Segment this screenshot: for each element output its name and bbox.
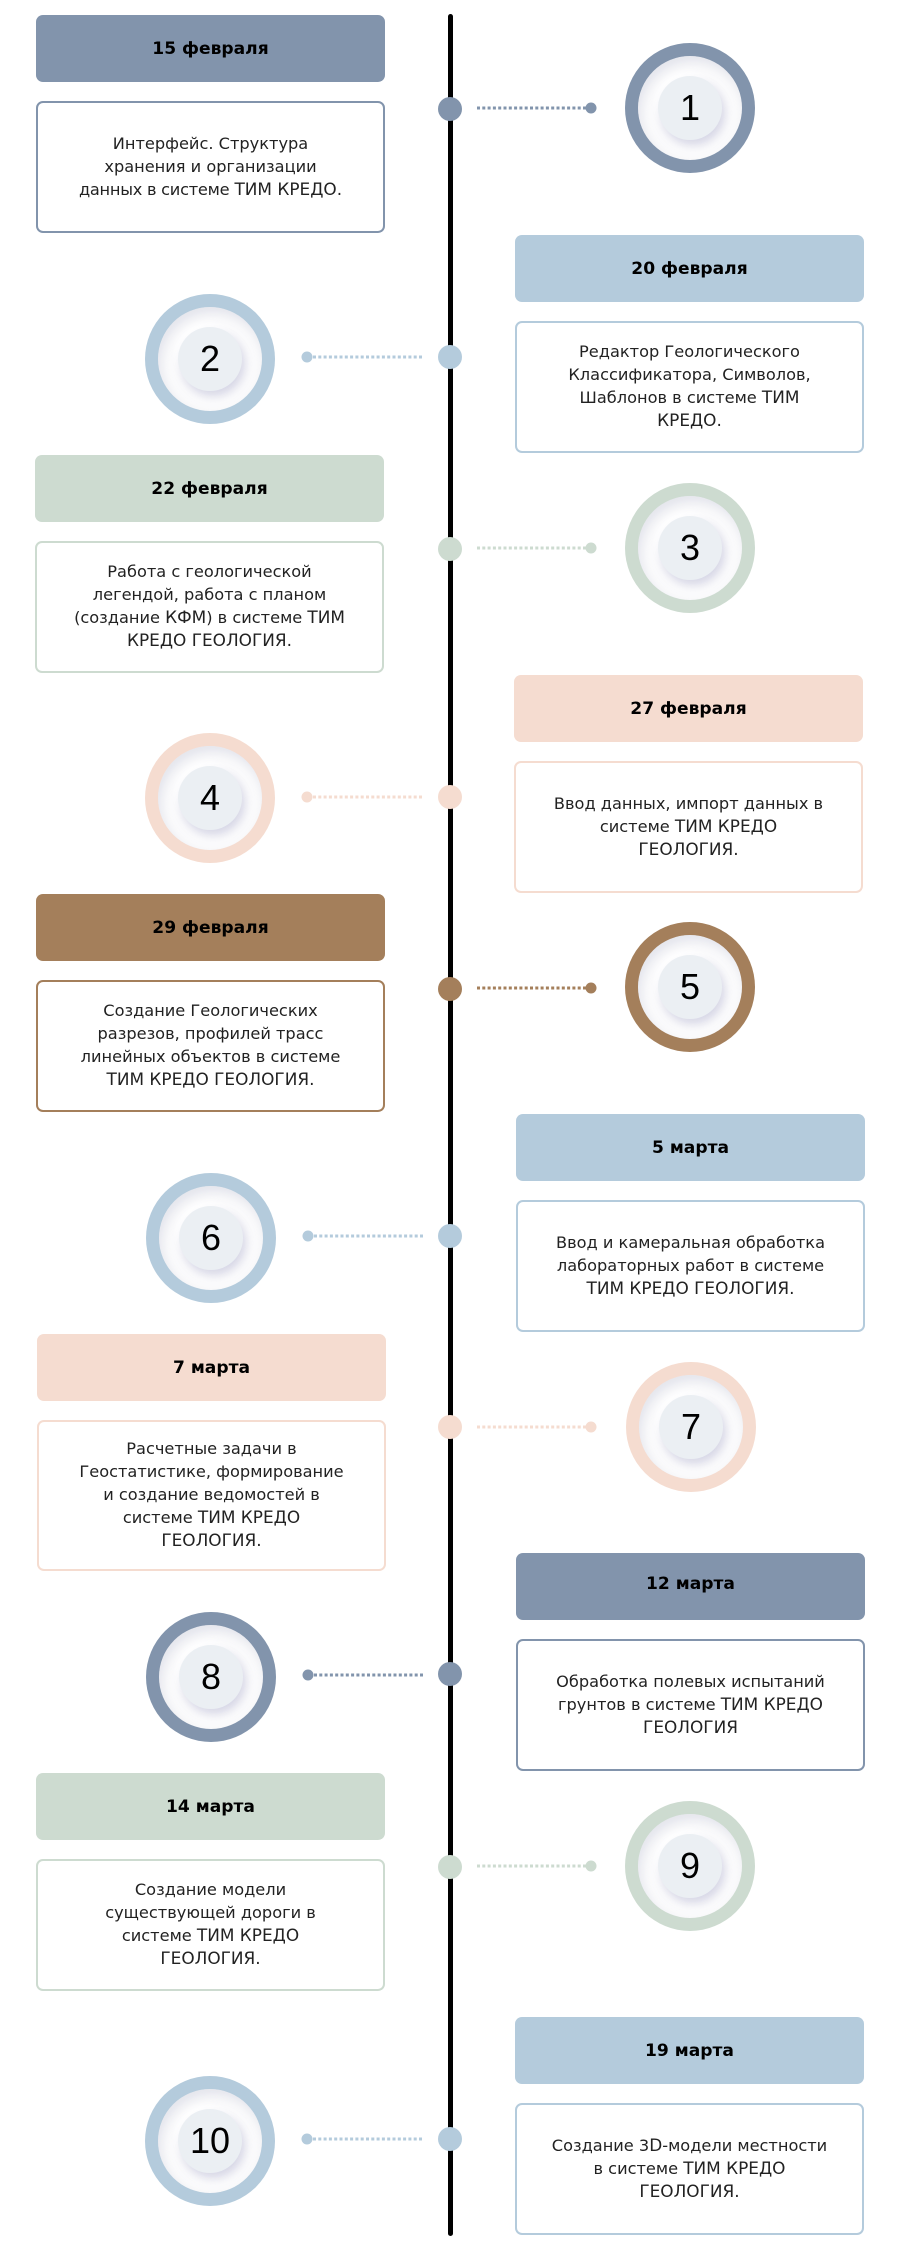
- timeline vertical line: [448, 14, 452, 2236]
- description box: КРЕДО ГЕОЛОГИЯ.: [127, 630, 292, 650]
- timeline node: [438, 2127, 462, 2151]
- number badge: 4: [200, 777, 220, 818]
- timeline node: [438, 1415, 462, 1439]
- dotted connector: [302, 352, 422, 362]
- date header: 14 марта: [166, 1796, 255, 1816]
- description box: [36, 1859, 385, 1991]
- description box: легендой, работа с планом: [93, 585, 326, 604]
- description box: ГЕОЛОГИЯ.: [638, 838, 739, 858]
- number badge: [145, 733, 275, 863]
- description box: ТИМ КРЕДО ГЕОЛОГИЯ.: [587, 1278, 794, 1298]
- number badge: [625, 1801, 755, 1931]
- timeline node: [438, 977, 462, 1001]
- dotted connector: [477, 102, 596, 114]
- description box: [35, 541, 384, 673]
- step 9: [36, 1773, 755, 1991]
- date header: [36, 1773, 385, 1840]
- number badge: [626, 1362, 756, 1492]
- step 3: [35, 455, 755, 673]
- description box: линейных объектов в системе: [81, 1047, 340, 1066]
- description box: Обработка полевых испытаний: [556, 1672, 825, 1690]
- number badge: 1: [680, 87, 700, 128]
- description box: [515, 321, 864, 453]
- number badge: 9: [680, 1845, 700, 1886]
- description box: Редактор Геологического: [579, 342, 800, 361]
- step 10: [145, 2017, 864, 2235]
- dotted connector: [302, 2134, 422, 2144]
- dotted connector: [477, 982, 596, 994]
- dotted connector: [302, 1670, 423, 1680]
- description box: системе ТИМ КРЕДО: [122, 1925, 299, 1945]
- number badge: [625, 483, 755, 613]
- number badge: 2: [200, 338, 220, 379]
- step 6: [146, 1114, 865, 1332]
- date header: 27 февраля: [630, 698, 747, 718]
- dotted connector: [302, 1230, 423, 1242]
- dotted connector: [302, 792, 422, 802]
- description box: [37, 1420, 386, 1571]
- description box: Создание модели: [135, 1880, 286, 1899]
- date header: [37, 1334, 386, 1401]
- number badge: [145, 2076, 275, 2206]
- timeline node: [438, 1224, 462, 1248]
- description box: Шаблонов в системе ТИМ: [580, 387, 799, 407]
- timeline node: [438, 1662, 462, 1686]
- description box: ГЕОЛОГИЯ.: [161, 1530, 262, 1550]
- timeline node: [438, 785, 462, 809]
- date header: 7 марта: [173, 1358, 250, 1378]
- description box: [36, 101, 385, 233]
- date header: 20 февраля: [631, 258, 748, 278]
- description box: ГЕОЛОГИЯ.: [639, 2180, 740, 2200]
- description box: [516, 1200, 865, 1332]
- description box: Ввод и камеральная обработка: [556, 1232, 825, 1252]
- dotted connector: [477, 1422, 596, 1432]
- date header: 29 февраля: [152, 918, 269, 938]
- number badge: 3: [680, 527, 700, 568]
- description box: системе ТИМ КРЕДО: [600, 816, 777, 836]
- description box: [514, 761, 863, 893]
- description box: Классификатора, Символов,: [568, 365, 811, 384]
- description box: лабораторных работ в системе: [557, 1256, 824, 1274]
- description box: хранения и организации: [104, 156, 317, 176]
- dotted connector: [477, 542, 596, 554]
- number badge: [625, 922, 755, 1052]
- step 5: [36, 894, 755, 1112]
- description box: [516, 1639, 865, 1771]
- date header: [516, 1553, 865, 1620]
- timeline node: [438, 537, 462, 561]
- date header: [514, 675, 863, 742]
- number badge: 7: [681, 1406, 701, 1447]
- description box: данных в системе ТИМ КРЕДО.: [79, 178, 342, 198]
- date header: 12 марта: [646, 1574, 735, 1594]
- description box: (создание КФМ) в системе ТИМ: [74, 607, 345, 627]
- description box: в системе ТИМ КРЕДО: [594, 2158, 785, 2178]
- description box: Создание 3D-модели местности: [552, 2134, 827, 2154]
- date header: [515, 235, 864, 302]
- description box: Расчетные задачи в: [126, 1439, 297, 1458]
- date header: [516, 1114, 865, 1181]
- date header: 19 марта: [645, 2040, 734, 2060]
- description box: Геостатистике, формирование: [79, 1462, 344, 1481]
- step 7: [37, 1334, 756, 1571]
- description box: и создание ведомостей в: [103, 1485, 320, 1504]
- timeline node: [438, 97, 462, 121]
- timeline node: [438, 345, 462, 369]
- description box: Ввод данных, импорт данных в: [554, 794, 823, 812]
- date header: 22 февраля: [151, 478, 268, 498]
- number badge: 5: [680, 966, 700, 1007]
- description box: существующей дороги в: [105, 1903, 316, 1922]
- date header: [36, 15, 385, 82]
- description box: системе ТИМ КРЕДО: [123, 1507, 300, 1527]
- description box: [36, 980, 385, 1112]
- description box: КРЕДО.: [657, 410, 722, 430]
- date header: 5 марта: [652, 1138, 729, 1158]
- step 1: [36, 15, 755, 233]
- date header: 15 февраля: [152, 38, 269, 58]
- description box: Интерфейс. Структура: [113, 134, 308, 152]
- number badge: [145, 294, 275, 424]
- dotted connector: [477, 1860, 596, 1872]
- description box: разрезов, профилей трасс: [98, 1024, 323, 1043]
- description box: ГЕОЛОГИЯ: [643, 1716, 738, 1736]
- number badge: 10: [190, 2120, 230, 2161]
- description box: [515, 2103, 864, 2235]
- number badge: 6: [201, 1217, 221, 1258]
- description box: Создание Геологических: [103, 1001, 318, 1020]
- number badge: 8: [201, 1656, 221, 1697]
- number badge: [625, 43, 755, 173]
- step 8: [146, 1553, 865, 1771]
- date header: [35, 455, 384, 522]
- description box: грунтов в системе ТИМ КРЕДО: [558, 1694, 823, 1714]
- step 2: [145, 235, 864, 453]
- number badge: [146, 1173, 276, 1303]
- description box: ГЕОЛОГИЯ.: [160, 1948, 261, 1968]
- date header: [515, 2017, 864, 2084]
- date header: [36, 894, 385, 961]
- step 4: [145, 675, 863, 893]
- description box: ТИМ КРЕДО ГЕОЛОГИЯ.: [107, 1069, 314, 1089]
- number badge: [146, 1612, 276, 1742]
- timeline node: [438, 1855, 462, 1879]
- description box: Работа с геологической: [107, 562, 312, 581]
